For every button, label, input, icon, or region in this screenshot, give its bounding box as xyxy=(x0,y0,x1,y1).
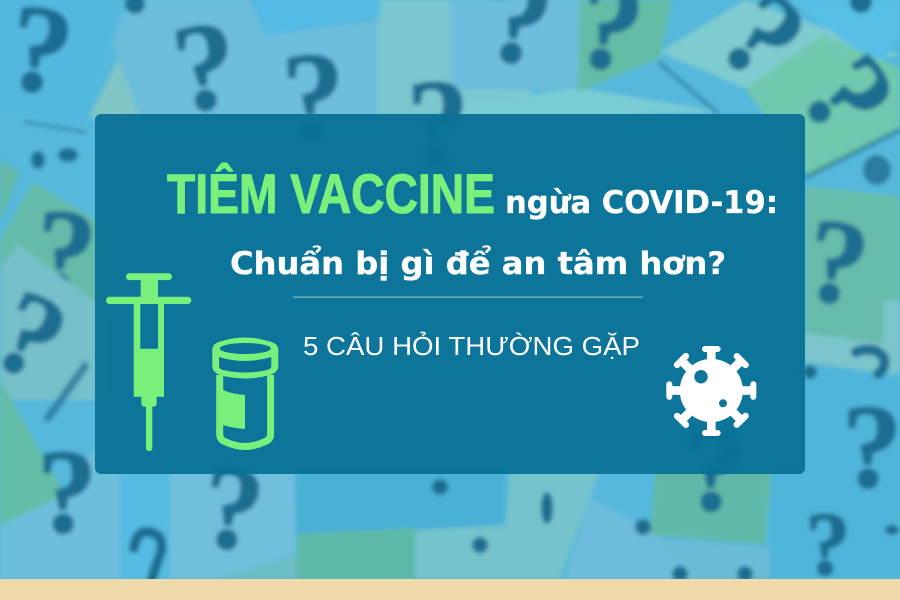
icon: virus xyxy=(666,346,756,436)
panel: title card xyxy=(95,114,805,474)
background: blurred sticky notes with question marks: ? xyxy=(37,425,97,558)
background: blurred sticky notes with question marks: ? xyxy=(685,403,745,536)
caption: 5 câu hỏi: 5 CÂU HỎI THƯỜNG GẶP xyxy=(303,330,640,361)
heading: ngừa covid-19: ngừa COVID-19: xyxy=(505,185,778,221)
background: blurred sticky notes with question marks: ? xyxy=(30,183,101,321)
background: blurred sticky notes with question marks: ? xyxy=(799,192,877,332)
background: blurred sticky notes with question marks: ? xyxy=(198,439,269,577)
heading: tiêm vaccine: TIÊM VACCINE xyxy=(167,162,495,225)
subheading question: Chuẩn bị gì để an tâm hơn? xyxy=(230,246,726,282)
background: blurred sticky notes with question marks: ? xyxy=(279,27,349,168)
background: blurred sticky notes with question marks: ? xyxy=(806,495,850,594)
icon: vaccine bottle xyxy=(212,338,278,446)
icon: syringe xyxy=(106,273,191,451)
background: blurred sticky notes with question marks: ? xyxy=(405,54,472,194)
footer band xyxy=(0,579,900,600)
